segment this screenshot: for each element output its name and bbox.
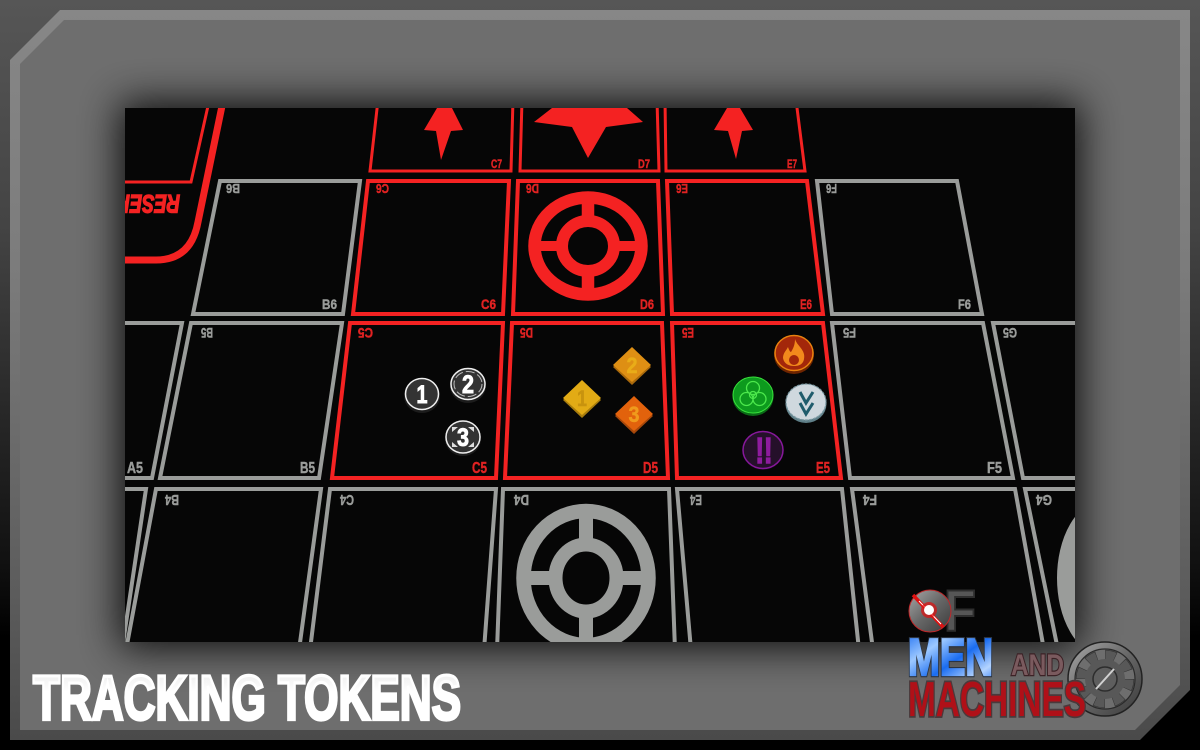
red target (534, 197, 642, 295)
token: yellow diamond 1 (563, 380, 601, 418)
token: fire (774, 336, 814, 374)
cell B5 (160, 323, 342, 478)
cell F5: F5 (843, 325, 856, 340)
gray target (524, 511, 648, 645)
logo: MACHINES: MACHINES (908, 673, 1086, 727)
cell E5 (672, 323, 841, 478)
game board map (125, 108, 1075, 642)
cell C7 with arrow: C7 (491, 157, 502, 171)
cell D6 with target: D6 (640, 296, 654, 312)
cell E4 (677, 489, 859, 650)
logo: AND: AND (1011, 649, 1064, 682)
reserve panel (125, 108, 226, 264)
token: orange diamond 3 (615, 396, 653, 434)
cell D6 with target: D6 (526, 181, 539, 196)
logo: AND: AND (1011, 649, 1064, 682)
cell E6 (667, 181, 823, 314)
cell E7 with arrow (665, 100, 805, 171)
logo: OF (909, 579, 976, 644)
cell D7 with arrow (520, 100, 659, 171)
cell E7 with arrow: E7 (787, 157, 797, 171)
cell D4 with target (497, 489, 675, 650)
token: amber diamond 2 (613, 347, 651, 385)
cell C4 (310, 489, 496, 650)
cell D4 with target: D4 (513, 491, 529, 508)
cell A5: A5 (127, 460, 143, 477)
cell E4: E4 (690, 491, 702, 508)
token: orange diamond 3: 3 (628, 402, 640, 427)
cell B5: B5 (201, 325, 213, 340)
cell A5 (125, 321, 184, 480)
cell F6 (817, 181, 982, 314)
logo: MACHINES: MACHINES (908, 673, 1086, 727)
logo: MEN: MEN (908, 629, 993, 687)
cell G5 (990, 321, 1075, 480)
cell F4: F4 (862, 491, 877, 508)
cell C5: C5 (358, 325, 373, 340)
cell E5: E5 (682, 325, 694, 340)
token: exclamation (742, 430, 784, 471)
token: chevrons (786, 384, 826, 423)
cell B4: B4 (165, 491, 179, 508)
title: TRACKING TOKENS (33, 664, 461, 734)
cell F5 (832, 323, 1013, 478)
cell C7 with arrow (370, 100, 513, 171)
cell E5: E5 (816, 460, 830, 477)
cell D5: D5 (520, 325, 533, 340)
map drop shadow (120, 102, 1080, 648)
logo: MEN: MEN (908, 629, 993, 687)
cell C5 (332, 323, 503, 478)
cell F6: F6 (826, 181, 837, 196)
cell C4: C4 (340, 491, 354, 508)
cell B6: B6 (226, 181, 240, 196)
reserve panel: RESERVE (91, 189, 180, 217)
logo: gear (1068, 642, 1142, 716)
cell G4 with target: G4 (1035, 491, 1052, 508)
logo: MACHINES (908, 673, 1086, 727)
token: yellow diamond 1: 1 (577, 386, 587, 411)
cell C6: C6 (376, 181, 389, 196)
logo (908, 579, 1142, 727)
cell F4 (852, 489, 1044, 650)
token: white 1 (404, 378, 440, 413)
cell D5: D5 (643, 460, 658, 477)
cell C6 (353, 181, 509, 314)
cell D5 (505, 323, 668, 478)
cell E6: E6 (800, 296, 812, 312)
token: white 1: 1 (416, 381, 428, 409)
token: white 3 (445, 421, 481, 456)
logo: OF: F (944, 579, 976, 644)
token: white 3: 3 (457, 424, 469, 452)
cell F5: F5 (987, 460, 1002, 477)
cell B5: B5 (300, 460, 315, 477)
cell B6: B6 (322, 296, 337, 312)
token: amber diamond 2: 2 (626, 353, 638, 378)
token: white 2 (450, 368, 486, 403)
token: white 2: 2 (462, 371, 474, 399)
cell B4 (126, 489, 321, 650)
cell C6: C6 (481, 296, 496, 312)
cell B6 (193, 181, 360, 314)
cell D7 with arrow: D7 (638, 157, 650, 171)
cell D6 with target (513, 181, 663, 314)
cell E6: E6 (676, 181, 688, 196)
cell F6: F6 (958, 296, 971, 312)
cell G5: G5 (1003, 325, 1017, 340)
token: biohazard (732, 377, 774, 416)
cell G4 with target (1022, 487, 1075, 642)
cell A4 (125, 487, 148, 642)
cell C5: C5 (472, 460, 487, 477)
token: exclamation: !! (756, 430, 772, 471)
